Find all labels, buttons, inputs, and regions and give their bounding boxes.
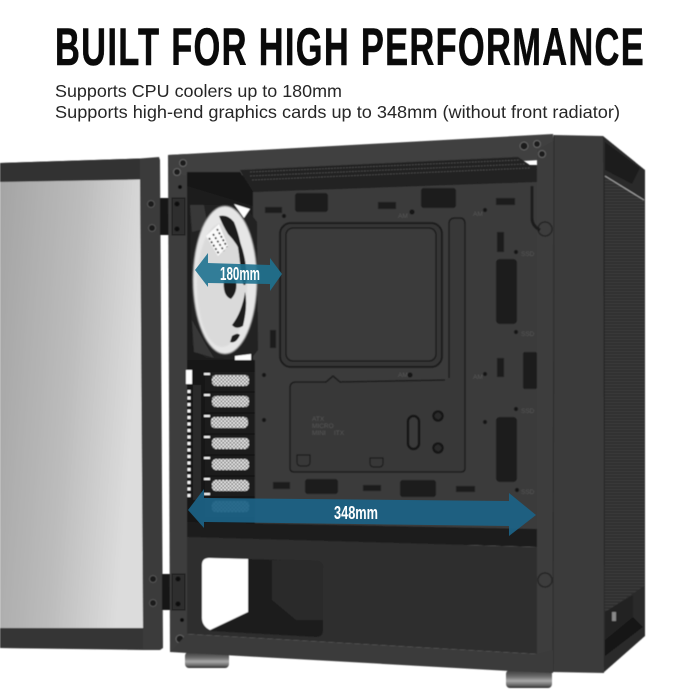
case right side face xyxy=(603,136,645,673)
text block: specifications: Supports CPU coolers up to 180mm xyxy=(55,81,342,101)
PC case xyxy=(168,134,645,688)
arrow: 180mm CPU cooler clearance xyxy=(195,253,282,291)
panel small labels: SSD xyxy=(521,331,535,338)
rear fan xyxy=(190,204,258,368)
PSU shroud top surface xyxy=(187,522,537,547)
panel small labels: AM xyxy=(398,372,408,379)
fan hex grille xyxy=(206,224,228,256)
feet xyxy=(185,652,229,668)
PSU opening xyxy=(202,558,323,637)
recess inner xyxy=(286,228,436,361)
mesh top highlight xyxy=(605,176,644,200)
side door panel xyxy=(0,157,172,650)
panel small labels: ATX xyxy=(312,416,325,423)
panel small labels: SSD xyxy=(521,408,535,415)
back panel xyxy=(253,182,537,546)
front mesh xyxy=(605,176,644,612)
opening dark interior xyxy=(210,559,323,637)
door screws xyxy=(148,200,156,606)
arrow label: 180mm: 180mm xyxy=(220,264,260,284)
fan blades glow xyxy=(197,223,247,347)
fan frame lugs xyxy=(190,205,214,358)
panel small labels: MINI xyxy=(312,430,326,437)
brace inner column xyxy=(193,385,201,500)
panel small labels: MICRO xyxy=(312,423,334,430)
white opening top xyxy=(234,204,250,218)
top panel band xyxy=(168,134,555,176)
front port strip xyxy=(605,595,633,640)
case left column xyxy=(168,154,187,652)
fan grille holes xyxy=(209,229,227,254)
fan ring xyxy=(193,206,257,354)
panel small labels: AM xyxy=(473,211,483,218)
arrow: 348mm graphics card clearance xyxy=(188,489,536,536)
small mount holes xyxy=(262,208,519,492)
hinge screws xyxy=(174,185,184,622)
top underside shadow xyxy=(187,172,253,206)
motherboard recess xyxy=(280,223,442,367)
bottom rail xyxy=(170,634,553,673)
white gap above slots xyxy=(186,370,192,384)
top corner screws xyxy=(174,140,546,666)
port icon xyxy=(612,612,616,621)
opening inner wall xyxy=(272,560,323,620)
fan frame xyxy=(190,205,258,360)
front trim column xyxy=(537,140,556,672)
door frame xyxy=(0,157,163,650)
brace dots xyxy=(188,390,190,497)
door glass xyxy=(0,180,143,628)
standoffs xyxy=(408,412,442,452)
top chamfer shadow xyxy=(605,142,640,184)
opening white area xyxy=(202,558,248,630)
fan interior gaps xyxy=(219,216,247,342)
text block: specifications xyxy=(55,81,620,122)
panel small labels: SSD xyxy=(521,489,535,496)
top mesh xyxy=(240,157,537,192)
case hinge plates xyxy=(172,198,185,610)
cable hook xyxy=(532,186,540,230)
right channel xyxy=(290,218,465,472)
hinges xyxy=(160,198,172,610)
trim pull knobs xyxy=(538,222,552,587)
recess outer xyxy=(280,223,442,367)
PCI slot covers xyxy=(204,372,255,517)
panel small labels xyxy=(312,211,535,496)
PCI brace xyxy=(187,360,255,536)
panel small labels: ITX xyxy=(334,430,345,437)
front bottom recess xyxy=(605,617,643,656)
plate notches xyxy=(297,455,383,467)
column seam xyxy=(553,135,554,672)
arrow label: 348mm: 348mm xyxy=(334,503,378,523)
panel small labels: AM xyxy=(473,374,483,381)
fan cage back xyxy=(187,180,253,370)
PSU shroud front xyxy=(187,537,537,654)
cable cutouts xyxy=(265,188,537,497)
text block: specifications: Supports high-end graphics cards up to 348mm (without front radiator) xyxy=(55,102,620,122)
panel small labels: SSD xyxy=(521,251,535,258)
interior dark background xyxy=(187,165,542,545)
white opening bottom xyxy=(235,354,251,368)
front panel column xyxy=(553,135,604,673)
panel small labels: AM xyxy=(398,213,408,220)
